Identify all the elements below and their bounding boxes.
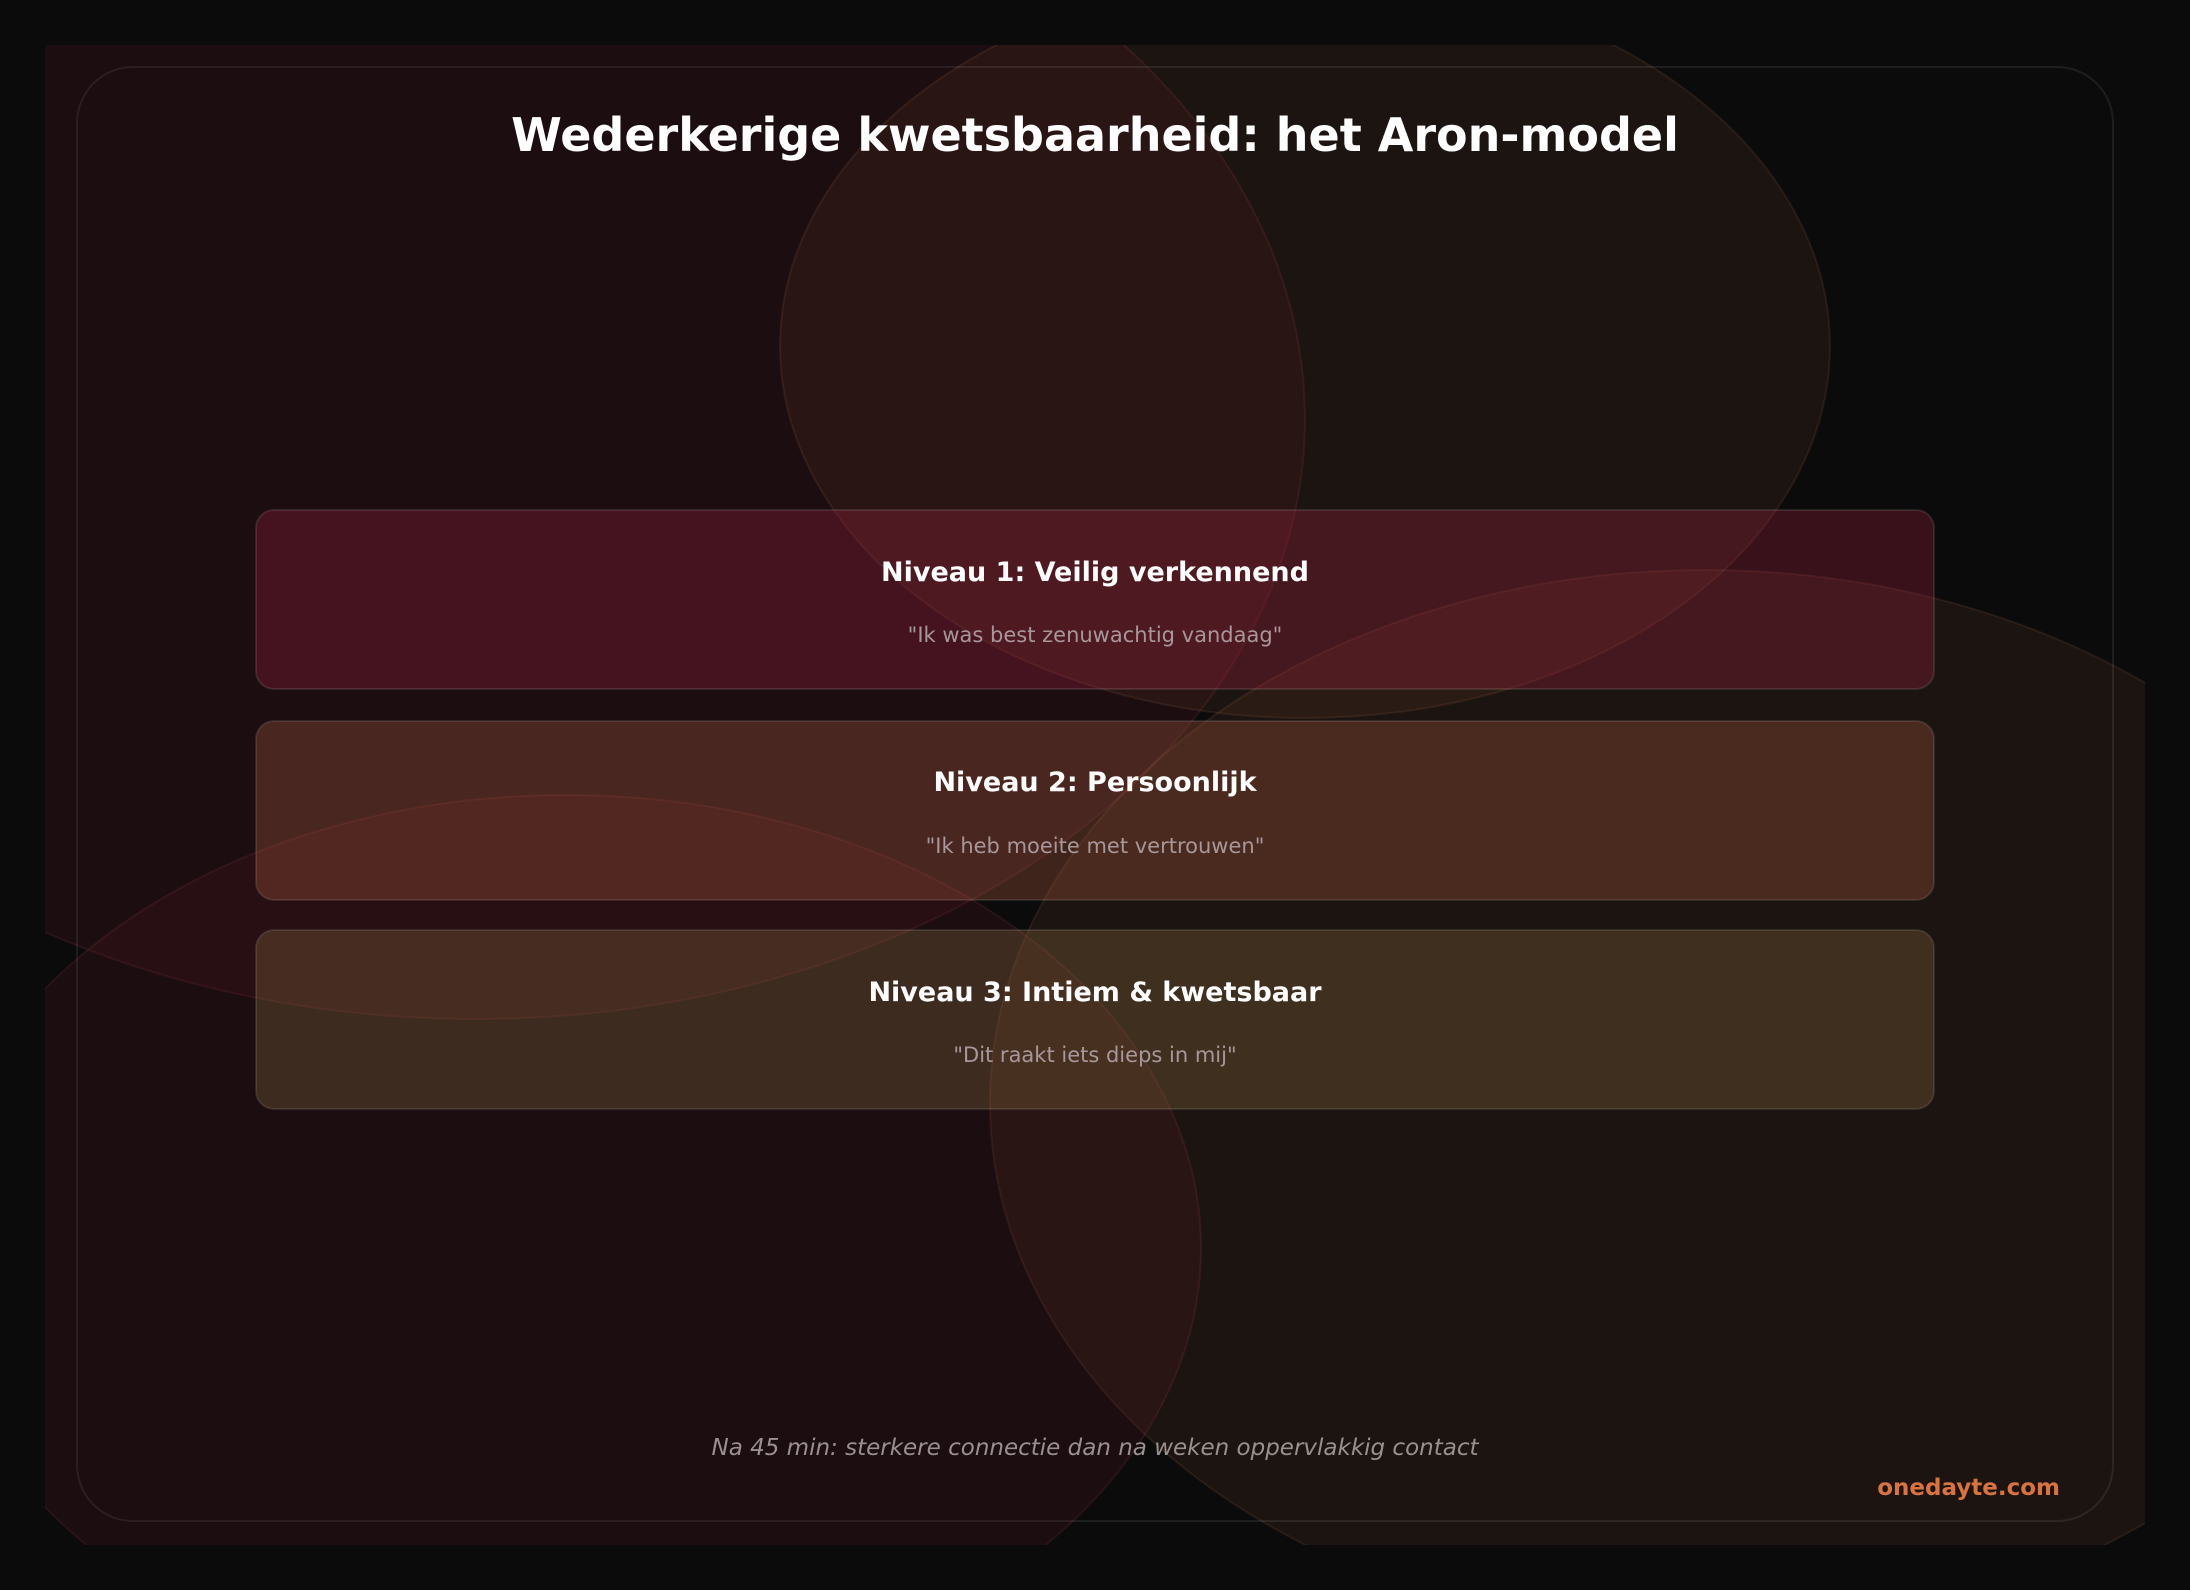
footer note: Na 45 min: sterkere connectie dan na weken oppervlakkig contact (711, 1435, 1479, 1461)
panel: niveau 3 (256, 930, 1934, 1109)
panel: niveau 1: Niveau 1: Veilig verkennend (881, 557, 1309, 588)
panel: niveau 3: "Dit raakt iets dieps in mij" (953, 1043, 1237, 1067)
panel: niveau 1: "Ik was best zenuwachtig vandaag" (908, 623, 1282, 647)
panel: niveau 1 (256, 510, 1934, 689)
title: Wederkerige kwetsbaarheid: het Aron-model (511, 108, 1679, 162)
panel: niveau 2: "Ik heb moeite met vertrouwen" (926, 834, 1264, 858)
brand: onedayte.com (1877, 1475, 2060, 1501)
panel: niveau 3: Niveau 3: Intiem & kwetsbaar (868, 977, 1322, 1008)
panel: niveau 2: Niveau 2: Persoonlijk (933, 767, 1258, 798)
panel: niveau 2 (256, 721, 1934, 900)
